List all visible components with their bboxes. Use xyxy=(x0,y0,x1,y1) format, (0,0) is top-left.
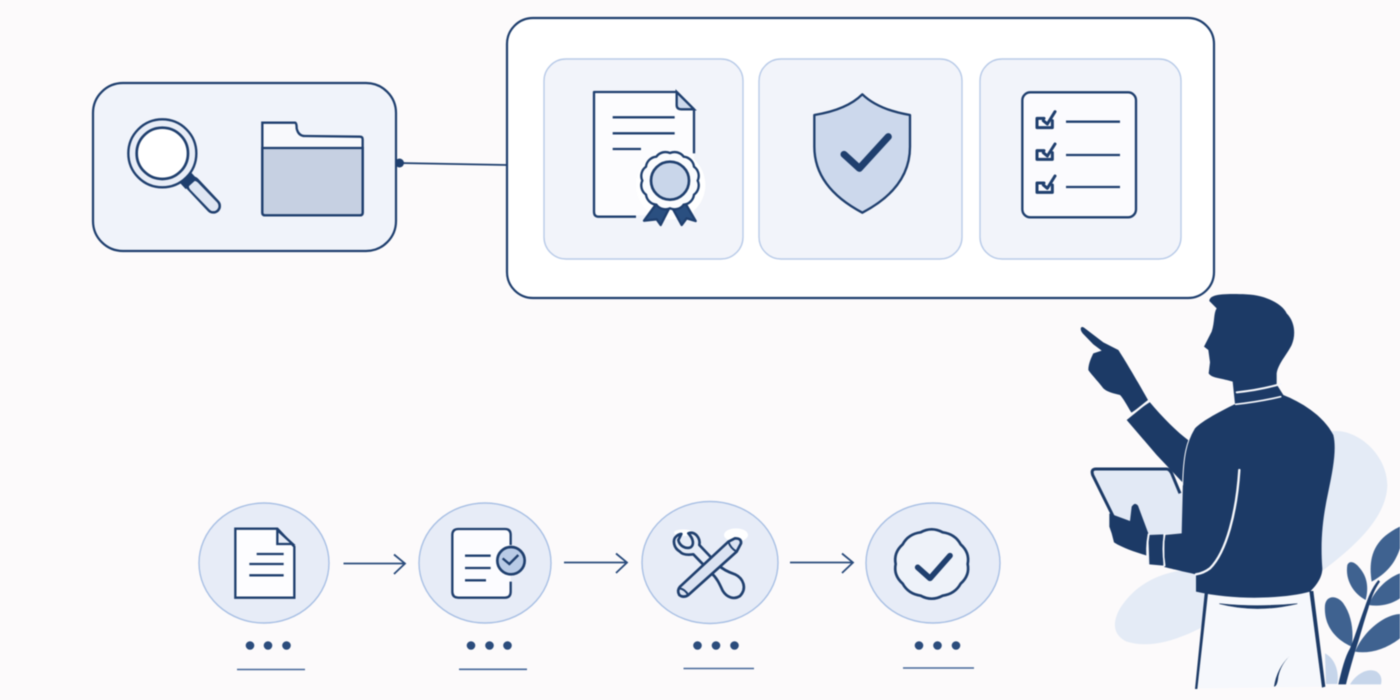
icon: badge with check xyxy=(895,529,968,599)
icon: wrench and pencil xyxy=(674,528,748,598)
torso and head xyxy=(1164,294,1335,598)
tablet xyxy=(1092,469,1182,535)
placeholder underline xyxy=(903,667,974,669)
plant xyxy=(1325,527,1400,684)
icon: folder xyxy=(262,123,363,215)
step circle xyxy=(199,503,329,623)
icon: document xyxy=(235,529,294,598)
process step 2: document review xyxy=(419,503,551,669)
connector line xyxy=(395,158,507,168)
pointing arm xyxy=(1127,402,1189,485)
process step 3: tools xyxy=(642,502,778,668)
step circle xyxy=(642,502,778,624)
panel: certificate xyxy=(544,59,743,259)
arrow 2 xyxy=(564,554,627,573)
arrow 1 xyxy=(344,554,405,574)
trousers xyxy=(1195,590,1325,689)
process step 4: approved badge xyxy=(866,503,1000,668)
placeholder underline xyxy=(684,668,754,670)
icon: shield with check xyxy=(814,94,910,213)
icon: certificate document xyxy=(594,92,705,225)
icon: checklist xyxy=(1022,92,1136,217)
placeholder underline xyxy=(237,668,305,670)
placeholder dots xyxy=(915,641,960,650)
placeholder underline xyxy=(459,668,527,670)
step circle xyxy=(866,503,1000,623)
person figure xyxy=(1081,294,1387,689)
holding hand xyxy=(1109,504,1148,556)
icon: reviewed document xyxy=(452,529,525,598)
step circle xyxy=(419,503,551,623)
placeholder dots xyxy=(246,641,291,650)
process step 1: document xyxy=(199,503,329,670)
placeholder dots xyxy=(693,641,739,650)
panel: shield xyxy=(759,59,962,259)
arrow 3 xyxy=(790,554,853,573)
garment highlights xyxy=(1132,384,1281,574)
illustration: person with tablet and plant xyxy=(1081,294,1400,689)
pointing hand xyxy=(1081,327,1148,413)
placeholder dots xyxy=(467,641,512,650)
panel: checklist xyxy=(980,59,1181,259)
icon: magnifying glass xyxy=(128,119,213,206)
panel: search and folder xyxy=(93,83,396,251)
cuff xyxy=(1148,534,1163,566)
background blobs xyxy=(1115,431,1387,644)
panel: large container xyxy=(507,18,1214,298)
